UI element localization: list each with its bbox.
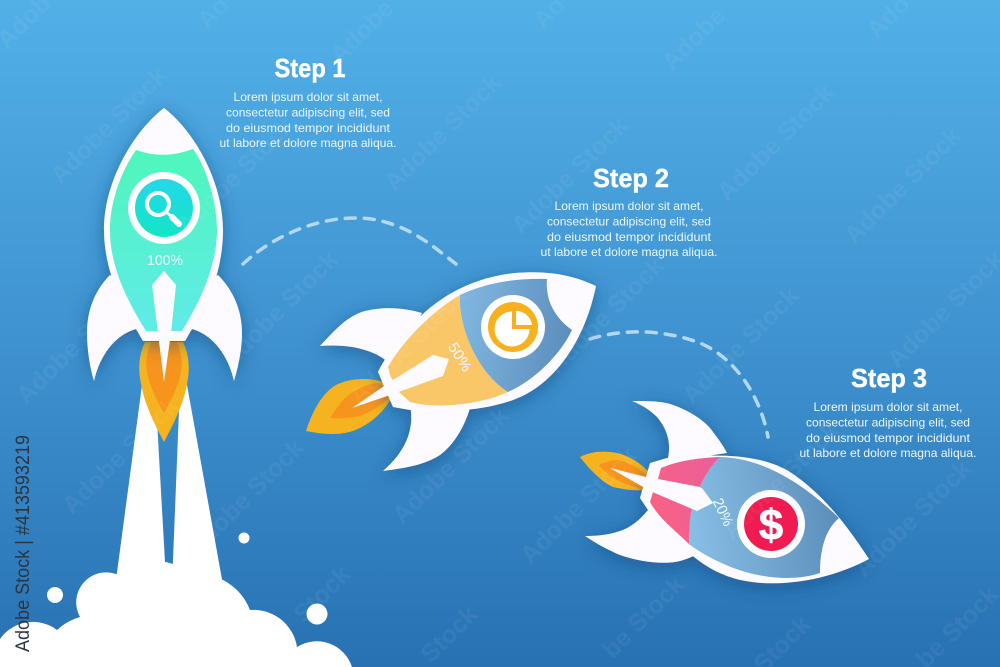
body step 1: do eiusmod tempor incididunt [226,121,391,135]
percent label 20%: 20% [709,495,736,529]
fins and hull rocket 2 [320,272,596,471]
smoke particle middle [238,532,250,544]
text block: step 3 [800,363,976,460]
stock watermarks: Adobe Stock [839,122,967,250]
stock watermarks: Stock [415,600,483,667]
stock watermarks: Adobe Stock [849,455,977,583]
stock watermarks: Adobe Stock [57,392,185,520]
stock watermarks: Adobe Stock [515,442,643,570]
body step 3: consectetur adipiscing elit, sed [806,416,970,430]
heading step 2: Step 2 [593,163,669,193]
flame rocket 2 [306,379,392,434]
stock watermarks: Adobe Stock [172,112,300,240]
body step 1 [220,90,396,150]
stock watermarks: be Stock [597,570,690,664]
stock watermarks: Adobe Stock [379,69,507,197]
body step 3: Lorem ipsum dolor sit amet, [814,400,962,414]
body step 3: do eiusmod tempor incididunt [806,431,971,445]
stock watermarks: Adobe Stock [216,246,344,374]
icon: pie chart [481,295,545,359]
heading step 3: Step 3 [851,363,927,393]
smoke particle right [306,604,328,624]
text block: step 1 [220,53,396,150]
rocket 1: 100% [87,108,242,442]
stock watermarks: Adobe Stock [677,282,805,410]
fins and hull rocket 3 [585,401,869,583]
percent label 100%: 100% [147,252,183,269]
body step 3: ut labore et dolore magna aliqua. [800,446,976,460]
spine rocket 3 [610,468,713,511]
stock watermarks: Adobe Stock [182,434,310,562]
smoke and exhaust cloud [0,385,352,667]
stock id label: Adobe Stock | #413593219 [13,435,34,652]
flame rocket 1 [139,342,189,442]
flame rocket 3 [580,452,650,490]
stock watermarks: Adobe Stock [712,79,840,207]
body step 2: consectetur adipiscing elit, sed [547,214,711,228]
text block: step 2 [540,163,718,259]
smoke particle left [47,587,63,603]
body step 1: Lorem ipsum dolor sit amet, [234,90,382,104]
body step 2: ut labore et dolore magna aliqua. [540,245,718,259]
dashed path: step 1 to step 2 [243,218,456,264]
rocket 3: 20% [580,401,869,583]
stock watermarks: Adobe [656,1,731,76]
spine rocket 1 [152,271,176,382]
stock watermarks: Adobe Stock [506,112,634,240]
stock watermarks: Adobe Stock [542,252,670,380]
stock watermarks: Stock [288,560,356,628]
stock watermarks: Adobe Stock [387,402,515,530]
heading step 1: Step 1 [274,53,346,83]
rocket 2: 50% [306,272,596,471]
stock watermarks: Adobe Stock [344,282,472,410]
fins and hull rocket 1 [87,108,242,381]
body step 3 [800,400,976,460]
icon: dollar coin: $ [759,501,783,550]
icon: dollar coin [737,490,805,558]
body step 2 [540,199,718,259]
spine rocket 2 [352,355,449,408]
percent label 50%: 50% [444,340,475,375]
body step 1: ut labore et dolore magna aliqua. [220,136,396,150]
blue section rocket 3 [689,457,839,578]
body step 1: consectetur adipiscing elit, sed [226,106,390,120]
stock watermarks: Adobe Stock [11,282,139,410]
green window rocket 1 [110,149,217,331]
body step 2: Lorem ipsum dolor sit amet, [554,199,704,213]
stock watermarks: Adobe Stock [717,417,845,545]
pink section rocket 3 [650,457,720,545]
icon: magnifier [128,172,200,244]
stock watermarks: Adobe Stock [45,62,173,190]
yellow section rocket 2 [388,295,508,405]
dashed path: step 2 to step 3 [590,332,768,437]
blue section rocket 2 [460,279,572,392]
body step 2: do eiusmod tempor incididunt [547,230,712,244]
